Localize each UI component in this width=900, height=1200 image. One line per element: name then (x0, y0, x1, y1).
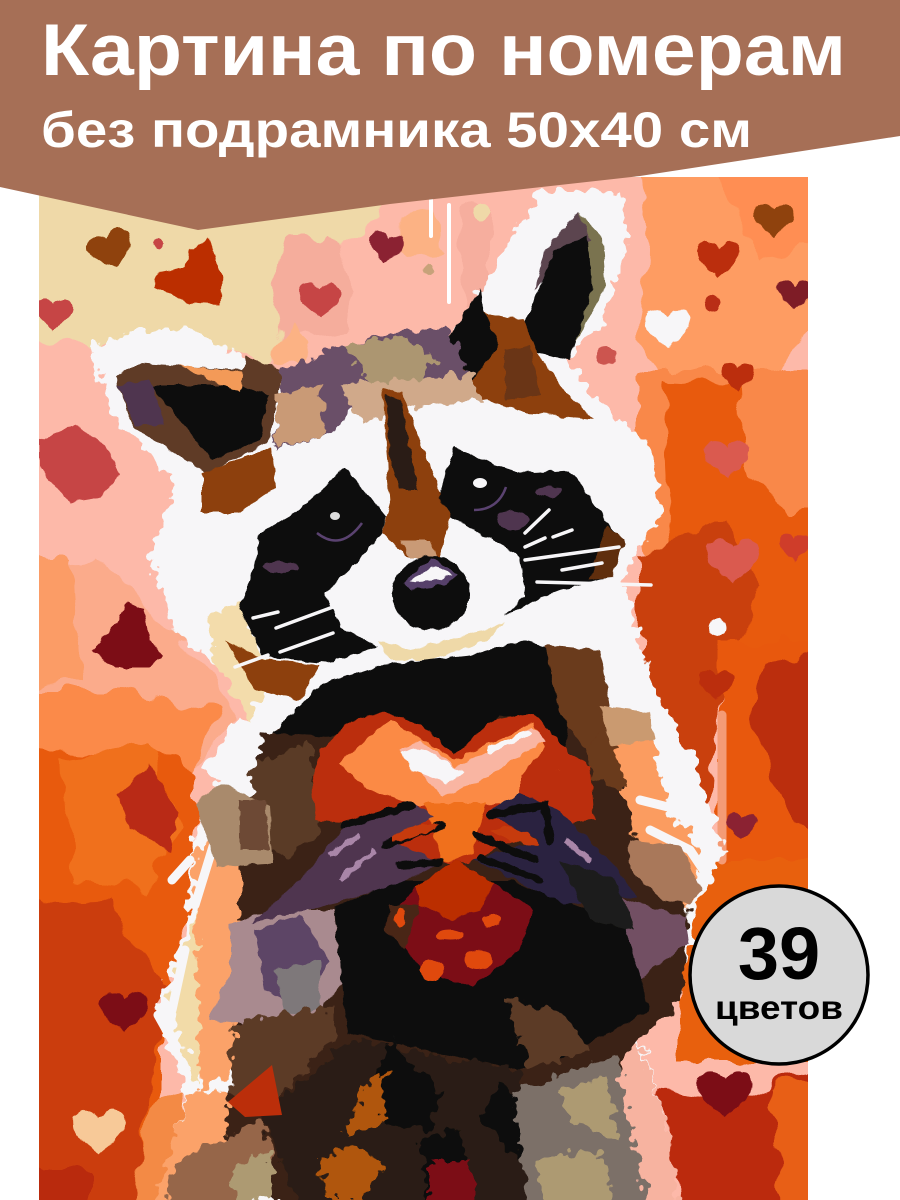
title: Картина по номерам (41, 10, 846, 91)
raccoon paws (251, 793, 637, 930)
painting: raccoon holding a heart (10, 150, 830, 1200)
lower heart (385, 860, 533, 987)
raccoon nose (392, 556, 470, 630)
lower body patches (165, 997, 650, 1200)
raccoon ears (115, 212, 606, 513)
raccoon head: forehead and eye mask (272, 327, 480, 447)
badge: colour count (690, 886, 868, 1064)
raccoon face: mask, stripe and muzzle (225, 387, 625, 700)
painting background (10, 150, 830, 1200)
raccoon chest: dark fur (195, 640, 702, 1070)
hearts scattered in the background (35, 204, 813, 1154)
background paint drips (431, 200, 722, 860)
badge label: цветов (715, 989, 843, 1026)
small red triangle on the lower body (228, 1065, 282, 1117)
fur streaks along the flanks (158, 800, 710, 1040)
number of colours: 39 (738, 912, 820, 995)
raccoon eyes (317, 478, 506, 541)
subtitle: без подрамника 50х40 см (41, 102, 752, 158)
red heart held by the raccoon (312, 712, 594, 863)
raccoon fur: white outline (92, 190, 724, 1200)
raccoon body base (225, 690, 690, 1200)
whiskers (233, 508, 653, 669)
banner (0, 0, 900, 230)
